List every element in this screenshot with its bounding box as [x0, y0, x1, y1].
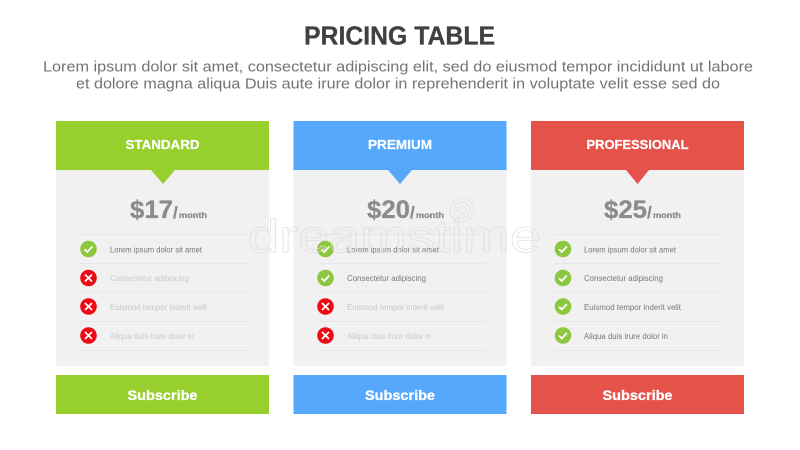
feature text: Euismod tempor inderit velit	[110, 303, 208, 312]
plan name: PROFESSIONAL	[586, 137, 689, 152]
plan name: STANDARD	[126, 137, 200, 152]
price: $17	[130, 196, 173, 224]
subscribe button: Subscribe	[602, 387, 673, 403]
icon: check	[317, 241, 334, 257]
subscribe button	[56, 375, 269, 414]
feature text: Aliqua duis irure dolor in	[110, 332, 194, 341]
feature text: Euismod tempor inderit velit	[347, 303, 445, 312]
card background	[531, 121, 744, 366]
header banner	[531, 121, 744, 184]
panel: standard plan	[56, 121, 269, 414]
subscribe button	[531, 375, 744, 414]
icon: check	[555, 270, 571, 286]
card background	[56, 121, 269, 366]
price	[604, 196, 681, 224]
feature text: Consectetur adipiscing	[110, 274, 189, 283]
feature text: Euismod tempor inderit velit	[584, 303, 682, 312]
watermark: dreamstime	[248, 210, 541, 262]
price: /	[647, 203, 652, 222]
subtitle: et dolore magna aliqua Duis aute irure dolor in reprehenderit in voluptate velit esse sed do	[76, 76, 720, 92]
feature text: Lorem ipsum dolor sit amet	[584, 246, 677, 254]
header banner	[294, 121, 506, 184]
icon: check	[555, 327, 571, 344]
panel: professional plan	[531, 121, 744, 414]
panel: premium plan	[294, 121, 506, 414]
feature text: Aliqua duis irure dolor in	[347, 332, 431, 341]
feature text: Lorem ipsum dolor sit amet	[110, 246, 203, 254]
feature text: Aliqua duis irure dolor in	[584, 332, 668, 341]
icon: cross	[80, 298, 97, 315]
title: PRICING TABLE	[304, 20, 495, 50]
price: /	[410, 203, 415, 222]
price: month	[416, 210, 444, 220]
feature text: Consectetur adipiscing	[584, 274, 663, 283]
row dividers	[554, 234, 720, 350]
feature text: Consectetur adipiscing	[347, 274, 426, 283]
watermark	[248, 198, 541, 262]
icon: check	[555, 298, 571, 315]
price: /	[173, 203, 178, 222]
card background	[294, 121, 506, 366]
subscribe button	[294, 375, 506, 414]
price	[130, 196, 207, 224]
row dividers	[80, 234, 248, 350]
price: $20	[367, 196, 410, 224]
icon: cross	[317, 327, 334, 344]
header banner	[56, 121, 269, 184]
icon: check	[555, 241, 571, 257]
subtitle	[43, 58, 753, 92]
price: $25	[604, 196, 647, 224]
icon: check	[80, 241, 97, 257]
icon: cross	[80, 270, 97, 286]
subscribe button: Subscribe	[365, 387, 435, 403]
icon: cross	[317, 298, 334, 315]
price: month	[653, 210, 681, 220]
feature text: Lorem ipsum dolor sit amet	[347, 246, 440, 254]
icon: cross	[80, 327, 97, 344]
subtitle: Lorem ipsum dolor sit amet, consectetur adipiscing elit, sed do eiusmod tempor incididunt ut labore	[43, 58, 753, 76]
row dividers	[317, 234, 485, 350]
price: month	[179, 210, 207, 220]
subscribe button: Subscribe	[128, 387, 198, 403]
price	[367, 196, 444, 224]
plan name: PREMIUM	[368, 137, 432, 152]
icon: check	[317, 270, 334, 286]
